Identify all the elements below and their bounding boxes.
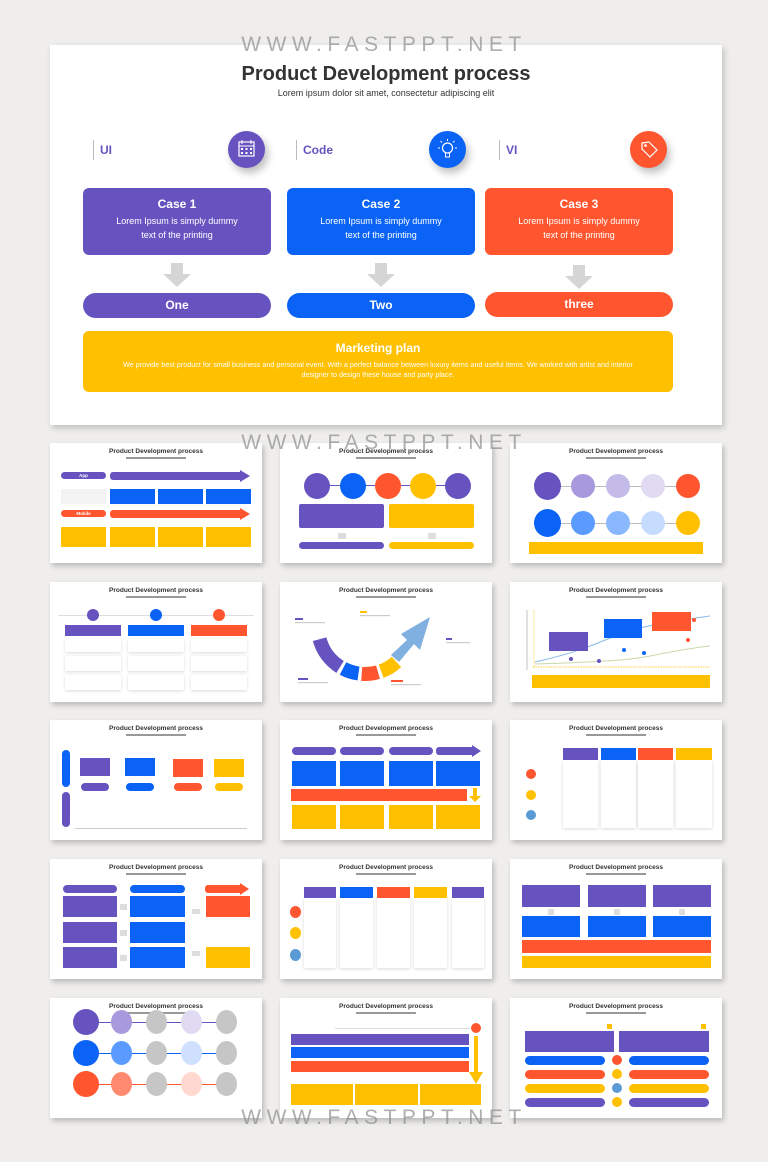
thumb 6: line chart [510,582,722,702]
thumb 9: phase table [510,720,722,840]
thumb 11: five phase table [280,859,492,979]
thumb 9: phase table: Product Development process [569,725,663,732]
panel: marketing plan: Marketing plan [336,341,420,355]
thumb 4: three columns: Product Development process [109,587,203,594]
watermark bottom: WWW.FASTPPT.NET [241,1106,527,1129]
panel: case 1 [83,188,271,255]
thumb 15: problems solutions: Product Development process [569,1003,663,1010]
thumb 2: circle flow [280,443,492,563]
thumb 1: vision roadmap: App [79,473,88,478]
thumb 14: goals bars [280,998,492,1118]
thumb 11: five phase table: Product Development process [339,864,433,871]
thumb 1: vision roadmap: Product Development process [109,448,203,455]
thumb 2: circle flow: Product Development process [339,448,433,455]
thumb 3: snake flow: Product Development process [569,448,663,455]
panel: case 2 [287,188,475,255]
thumb 4: three columns [50,582,262,702]
thumb 10: case flow: Product Development process [109,864,203,871]
label: VI [499,140,517,160]
thumb 1: vision roadmap: Mobile [76,511,91,516]
label: Code [296,140,333,160]
subtitle: Lorem ipsum dolor sit amet, consectetur adipiscing elit [278,88,494,98]
pill: One: One [165,298,189,312]
panel: case 3: Case 3 [560,197,598,211]
label: UI [93,140,112,160]
panel: case 2: Case 2 [362,197,400,211]
panel: marketing plan [83,331,673,392]
panel: case 3: text of the printing [543,230,615,240]
arrow: down 3 [565,265,593,289]
label: UI: UI [100,143,112,157]
label: VI: VI [506,143,517,157]
thumb 5: arc arrow: Product Development process [339,587,433,594]
panel: marketing plan: We provide best product for small business and personal event. With a perfect balance between luxury items and useful items. We worked with artist and interior designer to design these house and party place. [123,360,633,379]
icon: tag [630,131,667,168]
watermark middle: WWW.FASTPPT.NET [241,431,527,454]
panel: case 2: text of the printing [345,230,417,240]
pill: three: three [564,297,594,311]
pill: Two [287,293,475,318]
icon: lightbulb [429,131,466,168]
thumb 8: goals grid [280,720,492,840]
panel: case 2: Lorem Ipsum is simply dummy [320,216,442,226]
title: Product Development process [242,63,530,85]
thumb 15: problems solutions [510,998,722,1118]
icon: calendar [228,131,265,168]
thumb 7: vision budget process result [50,720,262,840]
thumb 5: arc arrow [280,582,492,702]
thumb 6: line chart: Product Development process [569,587,663,594]
panel: case 1: Lorem Ipsum is simply dummy [116,216,238,226]
watermark top: WWW.FASTPPT.NET [241,33,527,56]
thumb 12: six boxes [510,859,722,979]
thumb 12: six boxes: Product Development process [569,864,663,871]
thumb 7: vision budget process result: Product Development process [109,725,203,732]
arrow: down 1 [163,263,191,287]
thumb 14: goals bars: Product Development process [339,1003,433,1010]
pill: One [83,293,271,318]
panel: case 3 [485,188,673,255]
panel: case 1: text of the printing [141,230,213,240]
thumb 10: case flow [50,859,262,979]
main slide [50,45,722,425]
pill: Two: Two [369,298,393,312]
arrow: down 2 [367,263,395,287]
thumb 8: goals grid: Product Development process [339,725,433,732]
thumb 13: three row circles: Product Development process [109,1003,203,1010]
thumb 3: snake flow [510,443,722,563]
label: Code: Code [303,143,333,157]
panel: case 1: Case 1 [158,197,196,211]
thumb 1: vision roadmap [50,443,262,563]
panel: case 3: Lorem Ipsum is simply dummy [518,216,640,226]
pill: three [485,292,673,317]
thumb 13: three row circles [50,998,262,1118]
